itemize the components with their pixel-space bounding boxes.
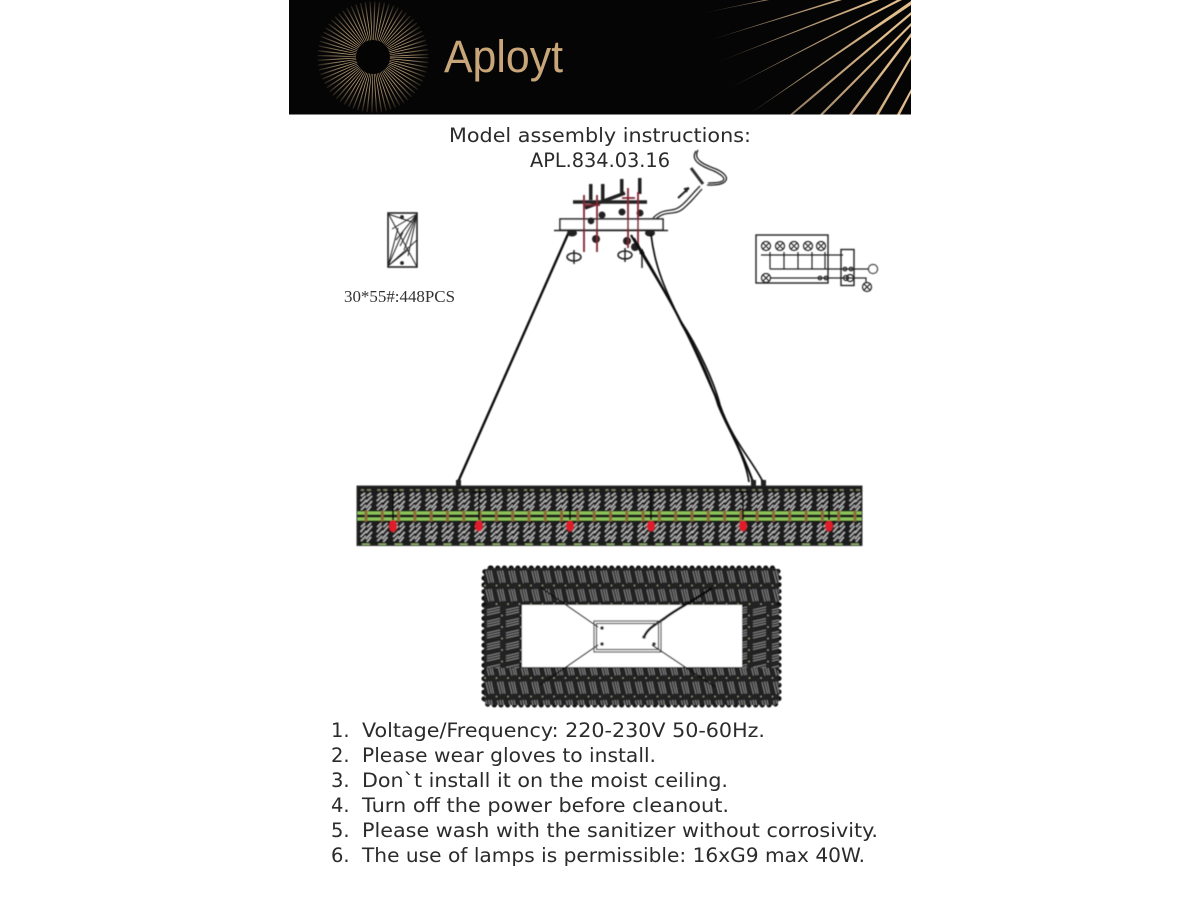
chandelier top view	[484, 568, 779, 705]
ceiling mount assembly	[554, 150, 726, 268]
item 5: 5.	[331, 819, 350, 842]
red lamp markers	[389, 520, 833, 532]
item 4: Turn off the power before cleanout.	[361, 794, 729, 817]
item 5: Please wash with the sanitizer without corrosivity.	[362, 819, 878, 842]
mounting plate	[554, 193, 668, 230]
cable clips	[456, 480, 766, 487]
rotation arrows	[567, 248, 644, 268]
item 6: The use of lamps is permissible: 16xG9 max 40W.	[361, 844, 865, 867]
decorative sun rays	[703, 0, 911, 114]
top view support wires	[540, 587, 715, 687]
crystal ring	[484, 568, 779, 705]
power cable	[653, 150, 726, 219]
wiring diagram	[756, 235, 878, 292]
title: APL.834.03.16	[530, 149, 670, 172]
title: Model assembly instructions:	[449, 124, 751, 147]
red guide lines	[583, 188, 638, 252]
top view ceiling plate	[594, 621, 661, 652]
item 1: Voltage/Frequency: 220-230V 50-60Hz.	[362, 719, 765, 742]
lamp holders	[386, 492, 836, 520]
chandelier side view	[357, 480, 862, 546]
instruction list	[331, 719, 878, 867]
top view screws	[600, 626, 656, 646]
item 4: 4.	[331, 794, 350, 817]
item 2: Please wear gloves to install.	[362, 744, 656, 767]
banner	[289, 0, 911, 114]
item 1: 1.	[331, 719, 350, 742]
suspension cables	[458, 234, 763, 482]
icon: sun logo	[337, 21, 409, 93]
item 2: 2.	[331, 744, 350, 767]
item 6: 6.	[331, 844, 350, 867]
title	[449, 124, 751, 172]
icon: crystal piece	[388, 213, 417, 267]
crystal band	[357, 486, 862, 546]
item 3: Don`t install it on the moist ceiling.	[362, 769, 728, 792]
item 3: 3.	[331, 769, 350, 792]
screws	[567, 178, 655, 251]
crystal quantity label: 30*55#:448PCS	[344, 287, 455, 306]
logo wordmark: Aployt	[444, 31, 563, 82]
